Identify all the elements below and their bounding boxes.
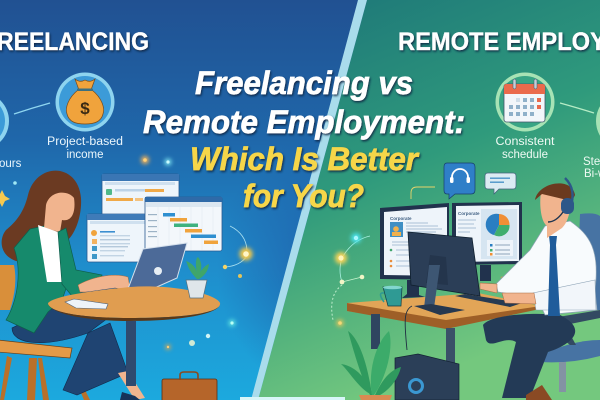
hair (535, 183, 575, 205)
icon: headset support bubble (444, 163, 475, 199)
label: project-based income: income (66, 149, 104, 161)
sparkles left (0, 156, 252, 350)
main title (143, 65, 465, 214)
monitor: right pie chart report (452, 202, 522, 281)
tie (548, 236, 560, 316)
sparkles right (332, 233, 370, 326)
plant (341, 331, 401, 400)
jacket body (6, 226, 68, 333)
title line 1: Freelancing vs (195, 65, 413, 101)
title line 3: Which Is Better (190, 141, 420, 177)
shirt (496, 221, 597, 315)
label: project-based income (47, 136, 123, 161)
panel: remote employment background (258, 0, 600, 400)
desk (347, 274, 541, 400)
briefcase (162, 372, 217, 400)
trousers (483, 314, 575, 398)
hair (2, 171, 81, 262)
window: gantt chart (145, 197, 222, 251)
monitor: center back view (408, 232, 480, 315)
connector line: remote icons (560, 103, 594, 113)
icon: money bag (56, 72, 114, 132)
label: steady bi-weekly pay (583, 156, 600, 180)
bottom glow (240, 397, 345, 400)
label: consistent schedule: Consistent (496, 136, 555, 148)
face (540, 192, 571, 238)
pie chart (486, 214, 510, 236)
label: consistent schedule (496, 136, 555, 161)
monitor: left corporate document (380, 203, 449, 298)
face and neck (44, 193, 74, 232)
chair (535, 213, 600, 392)
lower leg and shoe (118, 371, 145, 400)
icon: money bag: $ (80, 99, 90, 118)
shoe (526, 385, 552, 400)
circuit line (411, 187, 435, 199)
mug (380, 286, 402, 306)
window: task list (87, 214, 157, 262)
icon: steady pay (cropped) (596, 92, 600, 150)
cables (405, 306, 412, 350)
laptop (80, 243, 187, 302)
title line 4: for You? (243, 178, 364, 214)
sleeve and hand (533, 280, 596, 310)
label: project-based income: Project-based (47, 136, 123, 148)
monitor: right pie chart report: Corporate (458, 211, 480, 216)
connector line: freelancing icons (14, 103, 50, 114)
computer tower (395, 354, 459, 400)
icon: flexible hours clock (cropped) (0, 92, 9, 150)
hand (78, 275, 130, 292)
icon: chat bubble (485, 173, 516, 194)
shirt (38, 225, 65, 282)
legs (12, 305, 128, 395)
illustration: employee with headset (480, 178, 600, 400)
label: consistent schedule: schedule (502, 149, 548, 161)
title line 2: Remote Employment: (143, 104, 465, 140)
headset (565, 178, 573, 208)
potted plant on table (186, 257, 209, 298)
icon: calendar (496, 72, 554, 132)
jacket sleeve (58, 228, 102, 296)
round table (48, 286, 220, 386)
chair (0, 265, 90, 400)
monitor: left corporate document: Corporate (390, 216, 412, 221)
keyboard (455, 294, 522, 307)
diagonal divider (251, 0, 367, 400)
window: top dashboard (102, 174, 179, 244)
illustration: freelancer woman at table (0, 171, 145, 400)
